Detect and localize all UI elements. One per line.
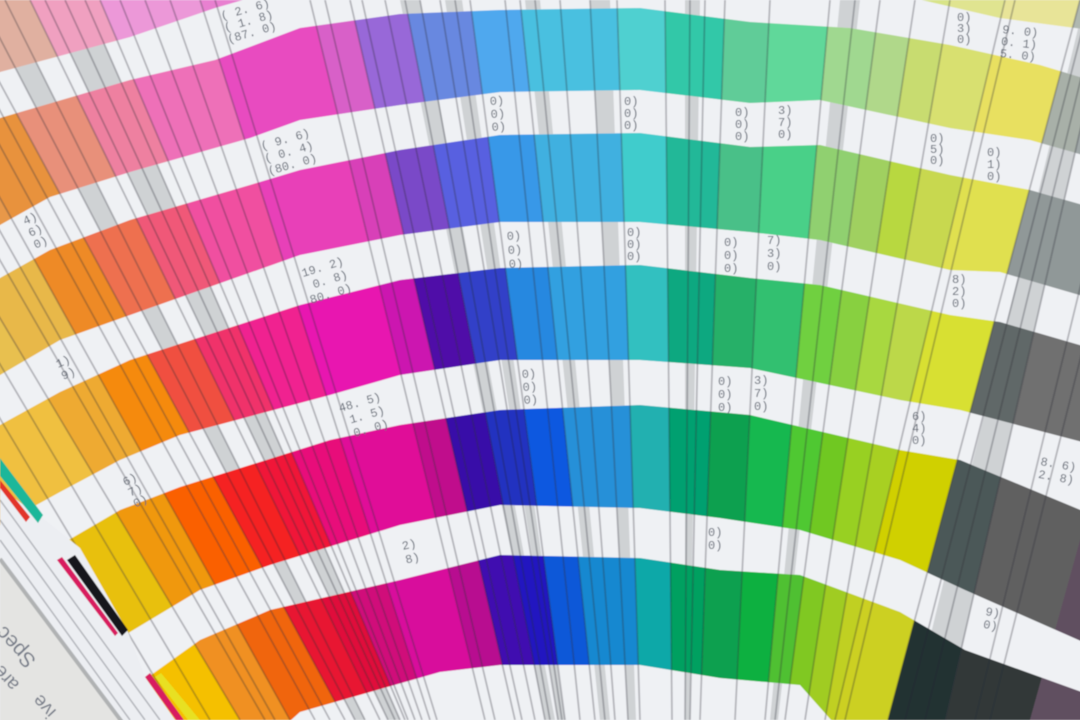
printed colour values on label bands: 1) [987, 158, 1001, 172]
printed colour values on label bands: 0) [708, 539, 722, 553]
printed colour values on label bands: 0) [735, 106, 749, 120]
printed colour values on label bands: 2) [401, 537, 418, 554]
printed colour values on label bands: 7) [767, 234, 781, 248]
printed colour values on label bands: 9) [984, 605, 1001, 621]
printed colour values on label bands: 0) [930, 154, 944, 168]
swatch row 1: light tints [0, 8, 1080, 533]
printed colour values on label bands: ( 0. 4) [263, 139, 315, 166]
printed colour values on label bands: 0) [952, 297, 966, 311]
printed colour values on label bands: 0) [718, 375, 732, 389]
printed colour values on label bands: 7) [126, 481, 145, 500]
printed colour values on label bands: 4) [21, 210, 40, 229]
printed colour values on label bands: 0) [489, 94, 505, 109]
printed colour values on label bands: 0. 8) [304, 268, 350, 294]
lower lime swatch strip [155, 673, 200, 720]
printed colour values on label bands: 0) [627, 238, 641, 252]
printed colour values on label bands: 0) [506, 229, 522, 244]
printed colour values on label bands: 0) [957, 11, 971, 25]
printed colour values on label bands: 9) [59, 365, 78, 384]
bottom-left white sheets [0, 488, 178, 720]
swatch row 3: strong tints [0, 266, 1080, 666]
printed colour values on label bands: 0) [957, 33, 971, 47]
printed colour values on label bands: 0. 1) [1000, 35, 1038, 53]
printed colour values on label bands: 7) [754, 387, 768, 401]
printed colour values on label bands: 0) [624, 119, 638, 133]
printed colour values on label bands: 0. 0) [345, 417, 390, 443]
printed colour values on label bands: 0) [522, 380, 538, 395]
printed colour values on label bands: 2) [952, 285, 966, 299]
printed colour values on label bands: 48. 5) [337, 390, 383, 416]
printed colour values on label bands: 8) [952, 273, 966, 287]
printed colour values on label bands: 1. 5) [341, 404, 387, 429]
printed colour values on label bands: 0) [490, 107, 506, 122]
printed colour values on label bands: 0) [523, 393, 538, 408]
swatch row 5: deepest hues [152, 505, 1042, 720]
printed colour values on label bands: 19. 2) [300, 255, 345, 281]
printed colour values on label bands: 8. 6) [1039, 455, 1077, 475]
printed colour values on label bands: 0) [624, 107, 638, 121]
black swatch strip [67, 555, 128, 636]
printed colour values on label bands: 0) [912, 434, 926, 448]
printed colour values on label bands: 5. 0) [999, 47, 1036, 65]
printed colour values on label bands: 0) [767, 260, 781, 274]
printed colour values on label bands: 0) [624, 95, 638, 109]
printed colour values on label bands: 5) [930, 143, 944, 157]
pink swatch strip [57, 557, 118, 636]
printed colour values on label bands: 6) [26, 222, 45, 241]
printed colour values on label bands: ( 1. 8) [223, 8, 275, 35]
printed colour values on label bands: 1) [54, 353, 73, 372]
printed colour values on label bands: 0) [724, 262, 738, 276]
printed colour values on label bands: 80. 0) [308, 282, 354, 308]
printed colour values on label bands: 2. 8) [1037, 468, 1075, 488]
printed colour values on label bands: (87. 0) [226, 20, 278, 47]
printed colour values on label bands: 0) [32, 234, 50, 252]
printed colour values on label bands: 6) [121, 471, 140, 490]
lower red swatch strip [145, 673, 184, 720]
printed colour values on label bands: 0) [987, 170, 1001, 184]
swatch row 2: medium tints [0, 134, 1080, 533]
swatch row 4: saturated hues [70, 363, 1080, 677]
printed colour values on label bands: 3) [778, 104, 792, 118]
printed colour values on label bands: 0) [131, 492, 150, 511]
printed colour values on label bands: 0) [627, 226, 641, 240]
printed colour values on label bands: 0) [778, 128, 792, 142]
printed colour values on label bands: 0) [521, 367, 537, 382]
printed colour values on label bands: 0) [987, 146, 1001, 160]
printed colour values on label bands: 0) [627, 250, 641, 264]
red swatch strip [0, 480, 30, 522]
printed colour values on label bands: 0) [718, 401, 732, 415]
printed colour values on label bands: 3) [767, 247, 781, 261]
printed colour values on label bands: 3) [957, 22, 971, 36]
printed colour values on label bands: 0) [708, 526, 722, 540]
printed colour values on label bands: 0) [724, 236, 738, 250]
printed colour values on label bands: 9. 0) [1002, 23, 1039, 41]
printed colour values on label bands: 0) [491, 120, 506, 135]
printed colour values on label bands: 0) [735, 118, 749, 132]
printed colour values on label bands: 7) [778, 116, 792, 130]
printed colour values on label bands: 0) [718, 388, 732, 402]
printed colour values on label bands: ( 9. 6) [259, 126, 312, 154]
printed colour values on label bands: 0) [724, 249, 738, 263]
printed colour values on label bands: 0) [982, 618, 999, 634]
printed colour values on label bands: 0) [930, 132, 944, 146]
printed colour values on label bands: 0) [754, 400, 768, 414]
printed colour values on label bands: 3) [754, 374, 768, 388]
printed colour values on label bands: 0) [508, 257, 524, 272]
printed colour values on label bands: 6) [912, 410, 926, 424]
sheet edge lines [0, 500, 160, 720]
printed colour values on label bands: (80. 0) [266, 151, 319, 179]
printed colour values on label bands: 4) [912, 422, 926, 436]
printed colour values on label bands: 0) [735, 130, 749, 144]
cover page with specification text [0, 557, 125, 720]
teal swatch strip [0, 458, 43, 523]
printed colour values on label bands: 8) [404, 550, 421, 567]
printed colour values on label bands: 0) [507, 243, 523, 258]
